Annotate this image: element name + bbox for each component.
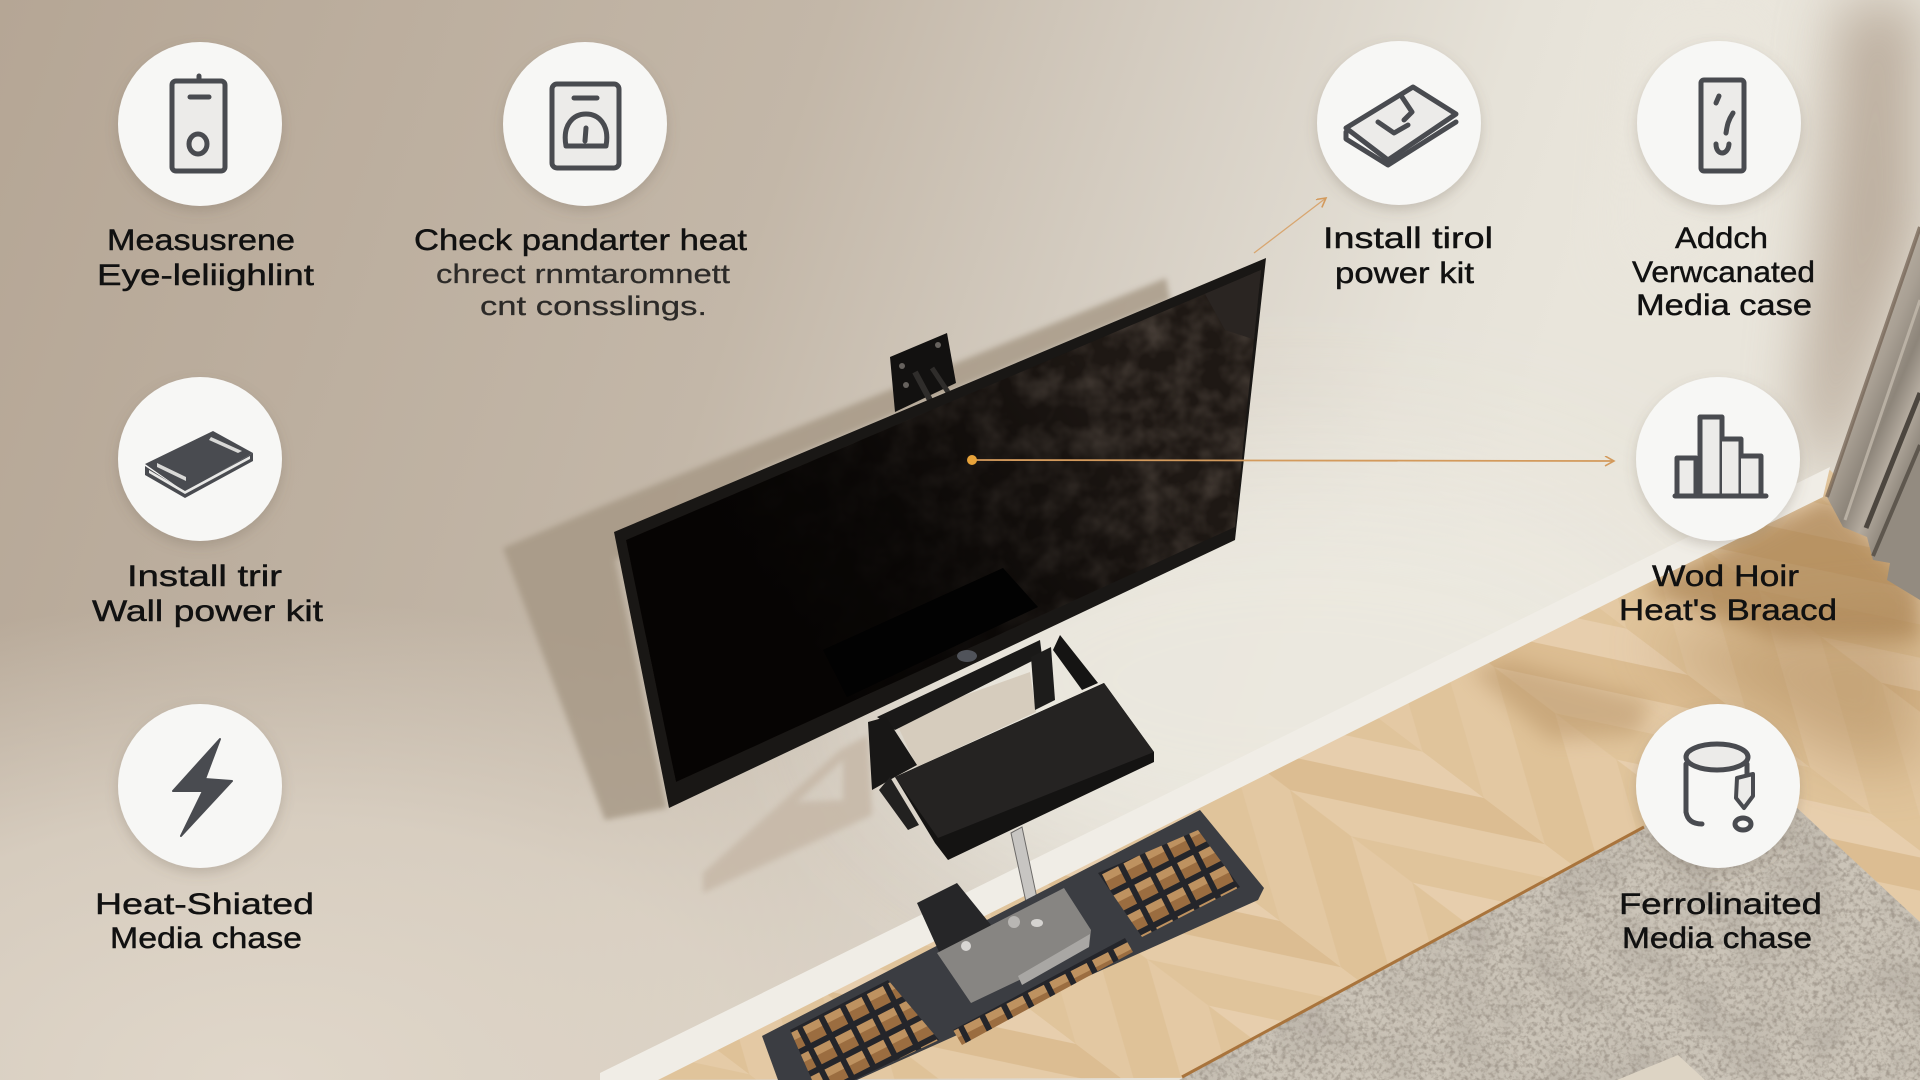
rug	[1179, 808, 1920, 1080]
step: ferroliniated media chase	[1619, 704, 1822, 955]
step: check heat	[414, 42, 748, 321]
floor vent	[762, 810, 1264, 1080]
television	[614, 258, 1266, 808]
label	[1619, 560, 1837, 627]
label	[1632, 222, 1815, 322]
label: Check pandarter heat	[414, 224, 748, 257]
label: Install trir	[127, 560, 282, 593]
label: Eye-leliighlint	[97, 259, 315, 292]
label	[97, 224, 315, 292]
junction box	[917, 883, 1091, 1003]
label: Heat-Shiated	[95, 888, 314, 921]
top wall mount	[890, 333, 956, 412]
icon: lightning bolt	[173, 739, 232, 836]
small object on rug	[1617, 1055, 1705, 1080]
step: wood floor heat bracket	[1619, 377, 1837, 627]
label: Addch	[1675, 222, 1768, 255]
icon: bar chart	[1675, 417, 1766, 496]
label	[92, 560, 324, 628]
wall behind bracket opening	[895, 672, 1036, 767]
TV wall shadow	[503, 278, 1170, 820]
label: chrect rnmtaromnett	[436, 259, 731, 289]
icon: tilted tablet	[1346, 87, 1456, 165]
label: Media chase	[110, 922, 302, 955]
label: Heat's Braacd	[1619, 594, 1837, 627]
icon: closed book	[145, 431, 253, 498]
icon: gauge panel	[552, 84, 619, 168]
arrow: screen to bars icon	[967, 455, 1614, 465]
label: Verwcanated	[1632, 256, 1815, 289]
floor	[600, 470, 1920, 1080]
label: cnt consslings.	[480, 291, 707, 321]
icon: canister	[1686, 744, 1753, 830]
baseboard	[600, 467, 1830, 1080]
step: install wall power kit	[92, 377, 324, 628]
label	[95, 888, 314, 955]
label: Ferrolinaited	[1619, 888, 1822, 921]
icon: device	[172, 76, 225, 171]
label	[1323, 222, 1493, 290]
label: Media case	[1636, 289, 1812, 322]
bracket arms	[868, 635, 1098, 830]
bracket shadow	[703, 735, 872, 893]
shelf	[895, 683, 1154, 860]
step: heat-shielded media chase	[95, 704, 314, 955]
step: install control kit	[1317, 41, 1493, 290]
label	[414, 224, 748, 321]
label: Install tirol	[1323, 222, 1493, 255]
arrow: TV corner to kit icon	[1254, 198, 1326, 253]
label: Measusrene	[107, 224, 295, 257]
TV and mount assembly	[503, 258, 1266, 1080]
label: Media chase	[1622, 922, 1812, 955]
support pole	[1011, 827, 1042, 925]
step: measure eye height	[97, 42, 315, 292]
label	[1619, 888, 1822, 955]
label: Wall power kit	[92, 595, 324, 628]
step: add ventilated media chase	[1632, 41, 1815, 322]
curtain	[1827, 227, 1920, 600]
label: Wod Hoir	[1652, 560, 1799, 593]
icon: slim panel	[1701, 80, 1744, 171]
label: power kit	[1335, 257, 1475, 290]
